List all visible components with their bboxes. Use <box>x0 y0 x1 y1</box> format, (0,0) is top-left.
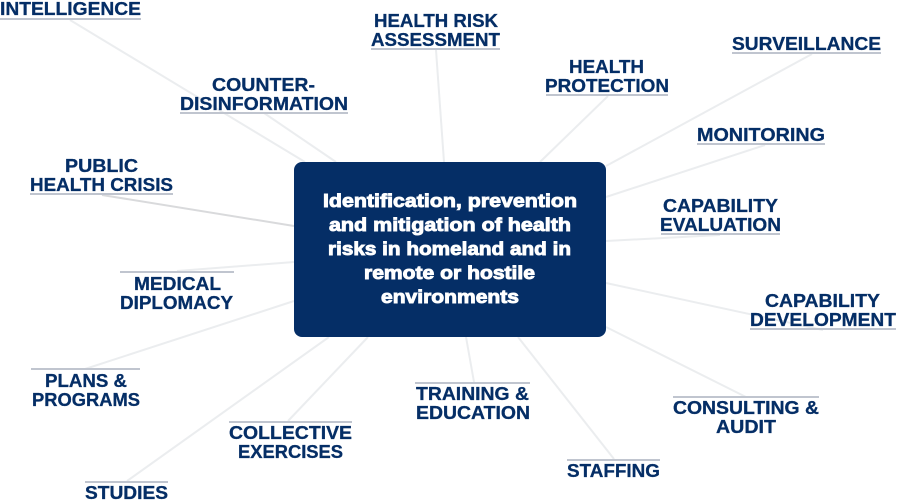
label: monitoring: MONITORING <box>697 124 825 145</box>
label: collective exercises <box>229 421 352 462</box>
connector: surveillance <box>606 54 812 166</box>
connector: consulting and audit <box>606 327 746 397</box>
connector: health protection <box>540 96 608 162</box>
connector: counter-disinformation <box>264 113 336 162</box>
label: health protection <box>545 56 669 96</box>
connector: training and education <box>466 337 474 382</box>
label: training and education: TRAINING & <box>416 383 529 404</box>
connector: intelligence <box>70 20 305 162</box>
label: capability development: DEVELOPMENT <box>750 309 897 330</box>
label: public health crisis <box>30 155 173 195</box>
connector: public health crisis <box>102 195 294 226</box>
label: plans and programs: PLANS & <box>45 370 127 391</box>
central text: risks in homeland and in <box>328 238 571 259</box>
label: consulting and audit: CONSULTING & <box>673 397 819 418</box>
label: medical diplomacy <box>120 271 234 313</box>
label: surveillance: SURVEILLANCE <box>732 33 881 54</box>
central text <box>323 190 577 307</box>
label: medical diplomacy: DIPLOMACY <box>120 292 234 313</box>
label: capability evaluation <box>660 195 781 235</box>
label: capability development <box>750 290 897 330</box>
label: health risk assessment: HEALTH RISK <box>374 10 499 31</box>
connector: capability development <box>606 283 823 330</box>
connector: capability evaluation <box>606 235 720 241</box>
label: collective exercises: COLLECTIVE <box>229 422 352 443</box>
label: capability development: CAPABILITY <box>765 290 881 311</box>
label: training and education: EDUCATION <box>416 402 530 423</box>
label: collective exercises: EXERCISES <box>238 441 343 462</box>
label: plans and programs: PROGRAMS <box>32 389 140 410</box>
connector: plans and programs <box>85 301 294 369</box>
label: counter-disinformation: DISINFORMATION <box>180 93 348 114</box>
connector: collective exercises <box>288 337 368 421</box>
label: capability evaluation: CAPABILITY <box>663 195 779 216</box>
label: counter-disinformation: COUNTER- <box>212 74 315 95</box>
label: health risk assessment <box>371 10 501 50</box>
label: consulting and audit: AUDIT <box>716 416 777 437</box>
connector: studies <box>127 337 329 481</box>
label: plans and programs <box>31 368 140 410</box>
central text: environments <box>381 286 519 307</box>
label: health protection: HEALTH <box>569 56 644 77</box>
connector: health risk assessment <box>436 50 444 162</box>
label: consulting and audit <box>673 396 819 437</box>
label: health protection: PROTECTION <box>545 75 669 96</box>
connector: medical diplomacy <box>177 262 294 271</box>
label: medical diplomacy: MEDICAL <box>134 273 221 294</box>
label: counter-disinformation <box>180 74 348 114</box>
label: public health crisis: HEALTH CRISIS <box>30 174 173 195</box>
central text: and mitigation of health <box>329 214 571 235</box>
connector: monitoring <box>606 145 765 197</box>
label: health risk assessment: ASSESSMENT <box>371 29 501 50</box>
label: training and education <box>415 382 530 423</box>
label: public health crisis: PUBLIC <box>65 155 138 176</box>
central panel <box>294 162 606 337</box>
central text: Identification, prevention <box>323 190 577 211</box>
label: capability evaluation: EVALUATION <box>660 214 781 235</box>
central text: remote or hostile <box>364 262 535 283</box>
connector: staffing <box>518 337 614 459</box>
label: staffing: STAFFING <box>567 460 660 481</box>
